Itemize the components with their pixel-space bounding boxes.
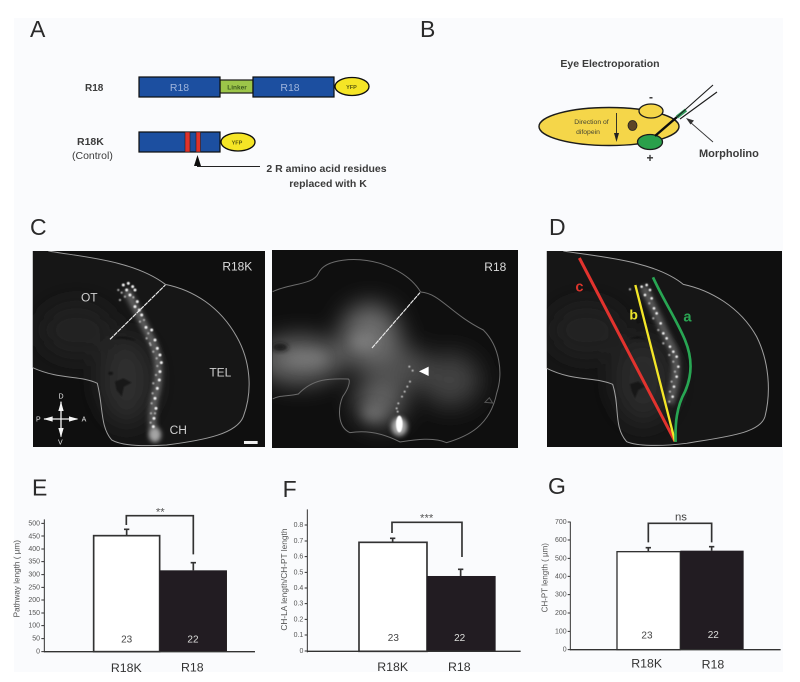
y axis bbox=[555, 519, 570, 654]
label: R18 bbox=[484, 260, 507, 274]
y axis: 600 bbox=[555, 537, 567, 544]
labels: c bbox=[575, 280, 583, 296]
bars: 22 bbox=[187, 635, 199, 646]
y axis bbox=[28, 519, 44, 656]
micrograph: D pathway measurements: b bbox=[629, 307, 638, 323]
y axis: 200 bbox=[28, 597, 40, 604]
micrograph: D pathway measurements: a bbox=[683, 309, 692, 325]
y axis: 400 bbox=[555, 573, 567, 580]
y axis: 0.6 bbox=[294, 554, 303, 561]
callout: residues replaced: 2 R amino acid residues bbox=[266, 163, 387, 175]
diagram: embryo bbox=[539, 85, 717, 150]
bars bbox=[617, 547, 744, 650]
bars: 23 bbox=[121, 635, 133, 646]
x labels: R18K bbox=[631, 656, 663, 670]
y axis: 0.5 bbox=[294, 569, 303, 576]
line c bbox=[579, 258, 675, 441]
diagram: embryo: Direction of bbox=[574, 119, 609, 126]
y axis: 0 bbox=[299, 648, 303, 655]
y axis: 100 bbox=[28, 623, 40, 630]
y axis title: Pathway length ( µm) bbox=[13, 540, 22, 617]
y axis title: CH-LA length/CH-PT length bbox=[279, 528, 289, 631]
y axis: 300 bbox=[28, 572, 40, 579]
panel: A constructs bbox=[30, 16, 387, 190]
construct: R18K: YFP bbox=[232, 140, 243, 146]
bars bbox=[359, 538, 496, 651]
panel: F ratio chart: R18 bbox=[448, 660, 471, 674]
y axis: 0.8 bbox=[294, 522, 303, 529]
label: R18: R18 bbox=[85, 83, 104, 94]
micrograph: R18K: TEL bbox=[209, 366, 232, 380]
significance bracket bbox=[126, 507, 193, 554]
arrow: morpholino pointer bbox=[686, 118, 713, 142]
bars: 23 bbox=[388, 633, 399, 644]
panel: E pathway length chart: R18 bbox=[181, 660, 204, 674]
heading: B: B bbox=[420, 16, 435, 42]
y axis: 250 bbox=[28, 584, 40, 591]
compass: V bbox=[58, 439, 63, 446]
construct: R18K bbox=[139, 132, 255, 152]
y axis bbox=[294, 509, 307, 655]
y axis: 50 bbox=[32, 636, 40, 643]
y axis: 0 bbox=[563, 647, 567, 654]
y axis: 500 bbox=[28, 521, 40, 528]
significance bracket bbox=[648, 511, 712, 542]
y axis: 500 bbox=[555, 555, 567, 562]
compass: A bbox=[82, 416, 87, 423]
diagram: embryo: difopein bbox=[576, 129, 600, 136]
micrograph: R18 bbox=[257, 250, 518, 448]
heading: E: E bbox=[32, 475, 47, 501]
heading: G: G bbox=[548, 473, 566, 499]
y axis: 100 bbox=[555, 628, 567, 635]
y axis: 400 bbox=[28, 546, 40, 553]
construct: R18 tandem: Linker bbox=[227, 84, 247, 92]
y axis: 0 bbox=[36, 649, 40, 656]
panel: G CH-PT length chart bbox=[541, 473, 781, 671]
construct: R18 tandem bbox=[139, 77, 369, 97]
construct: R18 tandem: R18 bbox=[280, 82, 300, 94]
label: R18K control: (Control) bbox=[72, 150, 113, 162]
compass: D bbox=[58, 393, 64, 400]
bars: 22 bbox=[708, 630, 719, 641]
bars: 23 bbox=[641, 631, 653, 642]
micrograph: R18K bbox=[33, 251, 265, 447]
y axis: 450 bbox=[28, 533, 40, 540]
label: plus: + bbox=[646, 151, 654, 165]
line a bbox=[653, 277, 691, 442]
x labels: R18K bbox=[377, 660, 409, 674]
heading: F: F bbox=[283, 476, 297, 502]
bars bbox=[94, 529, 227, 652]
y axis title: CH-PT length ( µm) bbox=[541, 543, 550, 612]
label: R18K control: R18K bbox=[77, 136, 104, 148]
heading: A: A bbox=[30, 16, 46, 42]
compass: P bbox=[36, 416, 41, 423]
line b bbox=[635, 285, 675, 441]
cut line bbox=[110, 285, 165, 339]
bars: 22 bbox=[454, 633, 466, 644]
micrograph: D pathway measurements bbox=[547, 251, 782, 447]
cut line bbox=[372, 293, 420, 348]
micrograph: R18K: CH bbox=[170, 423, 187, 437]
callout: residues replaced: replaced with K bbox=[289, 178, 367, 190]
y axis: 300 bbox=[555, 592, 567, 599]
y axis: 150 bbox=[28, 610, 40, 617]
label: minus: - bbox=[649, 90, 653, 104]
y axis: 0.1 bbox=[294, 632, 303, 639]
y axis: 0.7 bbox=[294, 538, 303, 545]
significance bracket: ns bbox=[675, 511, 687, 523]
significance bracket bbox=[392, 513, 462, 557]
labels: OT bbox=[81, 291, 98, 305]
panel: F ratio chart bbox=[279, 476, 521, 674]
label: Morpholino: Morpholino bbox=[699, 148, 759, 160]
significance bracket: ** bbox=[156, 507, 165, 519]
y axis: 0.4 bbox=[294, 585, 303, 592]
y axis: 0.3 bbox=[294, 601, 303, 608]
significance bracket: *** bbox=[420, 513, 434, 525]
y axis: 0.2 bbox=[294, 616, 303, 623]
arrowhead bbox=[419, 367, 429, 376]
panel letter: C: C bbox=[30, 214, 47, 240]
panel: G CH-PT length chart: R18 bbox=[702, 657, 724, 671]
y axis: 350 bbox=[28, 559, 40, 566]
y axis: 700 bbox=[555, 519, 567, 526]
panel: E pathway length chart bbox=[13, 475, 255, 675]
title: Eye Electroporation: Eye Electroporation bbox=[560, 58, 660, 70]
micrograph: R18K: R18K bbox=[222, 259, 252, 273]
construct: R18 tandem: R18 bbox=[170, 82, 189, 94]
compass bbox=[36, 393, 87, 446]
panel: B electroporation bbox=[420, 16, 759, 165]
x labels: R18K bbox=[111, 661, 143, 675]
panel letter: D: D bbox=[549, 214, 566, 240]
arrow: residues pointer bbox=[194, 155, 260, 166]
construct: R18 tandem: YFP bbox=[346, 85, 357, 91]
y axis: 200 bbox=[555, 610, 567, 617]
